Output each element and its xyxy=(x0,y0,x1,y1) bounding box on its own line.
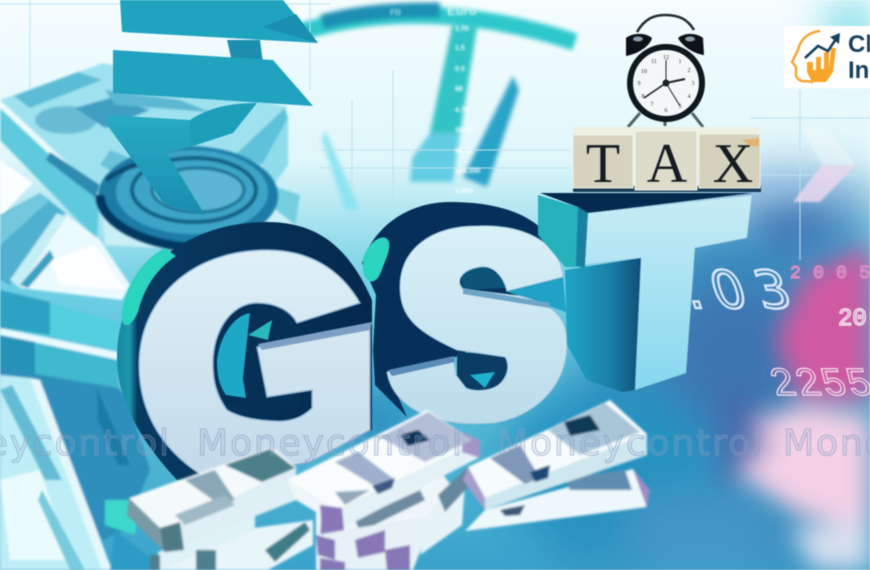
G extrusion xyxy=(117,222,372,480)
clock numbers: 2 xyxy=(688,68,690,74)
TAX wooden blocks: T xyxy=(586,133,620,195)
clock numbers: 9 xyxy=(638,81,640,87)
logo icon: orange hand bars xyxy=(807,48,836,82)
background chart: teal arc and spikes with currency figures: ro xyxy=(390,6,401,18)
pink digits on the right xyxy=(765,264,870,408)
S letter xyxy=(362,202,567,424)
logo arrowhead xyxy=(830,33,840,44)
background chart: teal arc and spikes with currency figures: 1.5 xyxy=(455,45,465,52)
clock handle xyxy=(637,15,694,32)
clock numbers: 5 xyxy=(678,104,682,110)
G letter xyxy=(117,222,372,480)
clock numbers: 11 xyxy=(651,59,657,65)
clock numbers: 7 xyxy=(650,102,654,108)
background chart: teal arc and spikes with currency figures: 18.43 xyxy=(455,127,473,134)
bundle: back right lower xyxy=(465,469,650,531)
background chart: teal arc and spikes with currency figures: 126.200 xyxy=(455,168,480,175)
logo: white card with head and chart xyxy=(784,26,870,88)
clock hands xyxy=(644,60,685,106)
logo icon: head outline xyxy=(792,31,820,82)
G face xyxy=(139,250,370,480)
lower bundle fragments xyxy=(150,465,470,570)
money bundles xyxy=(127,400,650,570)
bundle: centre xyxy=(287,410,480,530)
pink digits on the right: 2005 xyxy=(790,264,870,284)
coin stack xyxy=(98,146,278,248)
S extrusion xyxy=(362,202,563,417)
background chart: teal arc and spikes with currency figures: 1.000 xyxy=(455,188,473,195)
TAX wooden blocks: A xyxy=(647,133,688,195)
rupee symbol xyxy=(98,0,318,248)
background chart: teal arc and spikes with currency figures: 1.75 xyxy=(455,26,469,33)
clock numbers: 1 xyxy=(678,59,682,65)
watermark: Moneycontrol xyxy=(0,423,870,464)
banknotes: top left note under rupee xyxy=(0,63,300,300)
clock legs xyxy=(628,113,703,127)
background chart: teal arc and spikes with currency figures: 4.75 xyxy=(455,107,469,114)
clock face xyxy=(630,47,702,119)
watermark: Moneycontrol: Moneycontrol xyxy=(497,423,762,464)
clock numbers: 6 xyxy=(664,108,668,114)
bundle: right xyxy=(463,400,647,510)
clock numbers: 4 xyxy=(688,94,690,100)
clock numbers: 8 xyxy=(642,94,644,100)
logo wordmark xyxy=(848,31,870,84)
banknote stacks: left side xyxy=(0,290,165,570)
background digits: seven-segment figures: .03 xyxy=(674,259,799,321)
clock numbers xyxy=(638,55,694,114)
background chart: teal arc and spikes with currency figures: 68 xyxy=(455,86,463,93)
clock numbers: 3 xyxy=(692,81,694,87)
TAX wooden blocks xyxy=(573,127,761,195)
S face xyxy=(387,226,567,424)
clock numbers: 10 xyxy=(641,69,647,75)
clock bells xyxy=(626,34,704,56)
left lower note xyxy=(0,160,33,217)
watermark: Moneycontrol: Moneycontrol xyxy=(197,423,462,464)
TAX wooden blocks: X xyxy=(713,133,753,195)
pink digits on the right: 20 xyxy=(838,306,867,333)
logo wordmark: In xyxy=(848,57,869,84)
T letter xyxy=(538,193,753,392)
background chart: teal arc and spikes with currency figures: Euro xyxy=(447,3,477,18)
clock numbers: 12 xyxy=(663,55,669,61)
T face xyxy=(585,195,752,390)
background chart: teal arc and spikes with currency figures xyxy=(0,0,870,260)
background chart: teal arc and spikes with currency figures: 96.01 xyxy=(455,148,473,155)
T extrusion xyxy=(538,195,578,267)
bundle: left xyxy=(127,447,296,552)
chevron arrow xyxy=(793,127,856,202)
alarm clock xyxy=(626,15,704,127)
background chart: teal arc and spikes with currency figures: 0.5 xyxy=(455,66,465,73)
logo icon: rising arrow xyxy=(805,36,838,58)
